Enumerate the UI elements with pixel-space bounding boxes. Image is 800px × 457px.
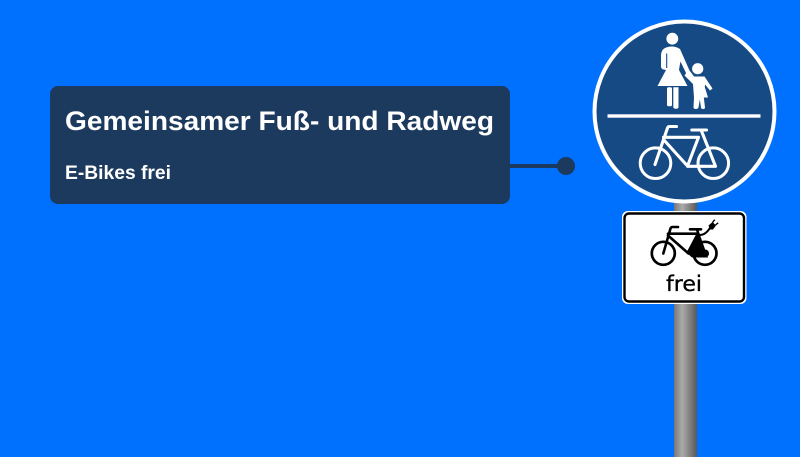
round blue sign bbox=[594, 22, 774, 202]
icon: pedestrians bbox=[658, 33, 712, 109]
callout panel bbox=[50, 86, 510, 204]
callout subtext: E-Bikes frei bbox=[65, 163, 171, 184]
connector line and dot bbox=[508, 157, 575, 175]
sign pole bbox=[674, 195, 697, 457]
icon: e-bike bbox=[652, 220, 718, 265]
icon: bicycle bbox=[640, 126, 729, 178]
divider line bbox=[608, 114, 760, 118]
callout heading: Gemeinsamer Fuß- und Radweg bbox=[65, 106, 494, 136]
supplementary sign bbox=[622, 211, 746, 304]
sign text: frei: frei bbox=[666, 272, 702, 296]
